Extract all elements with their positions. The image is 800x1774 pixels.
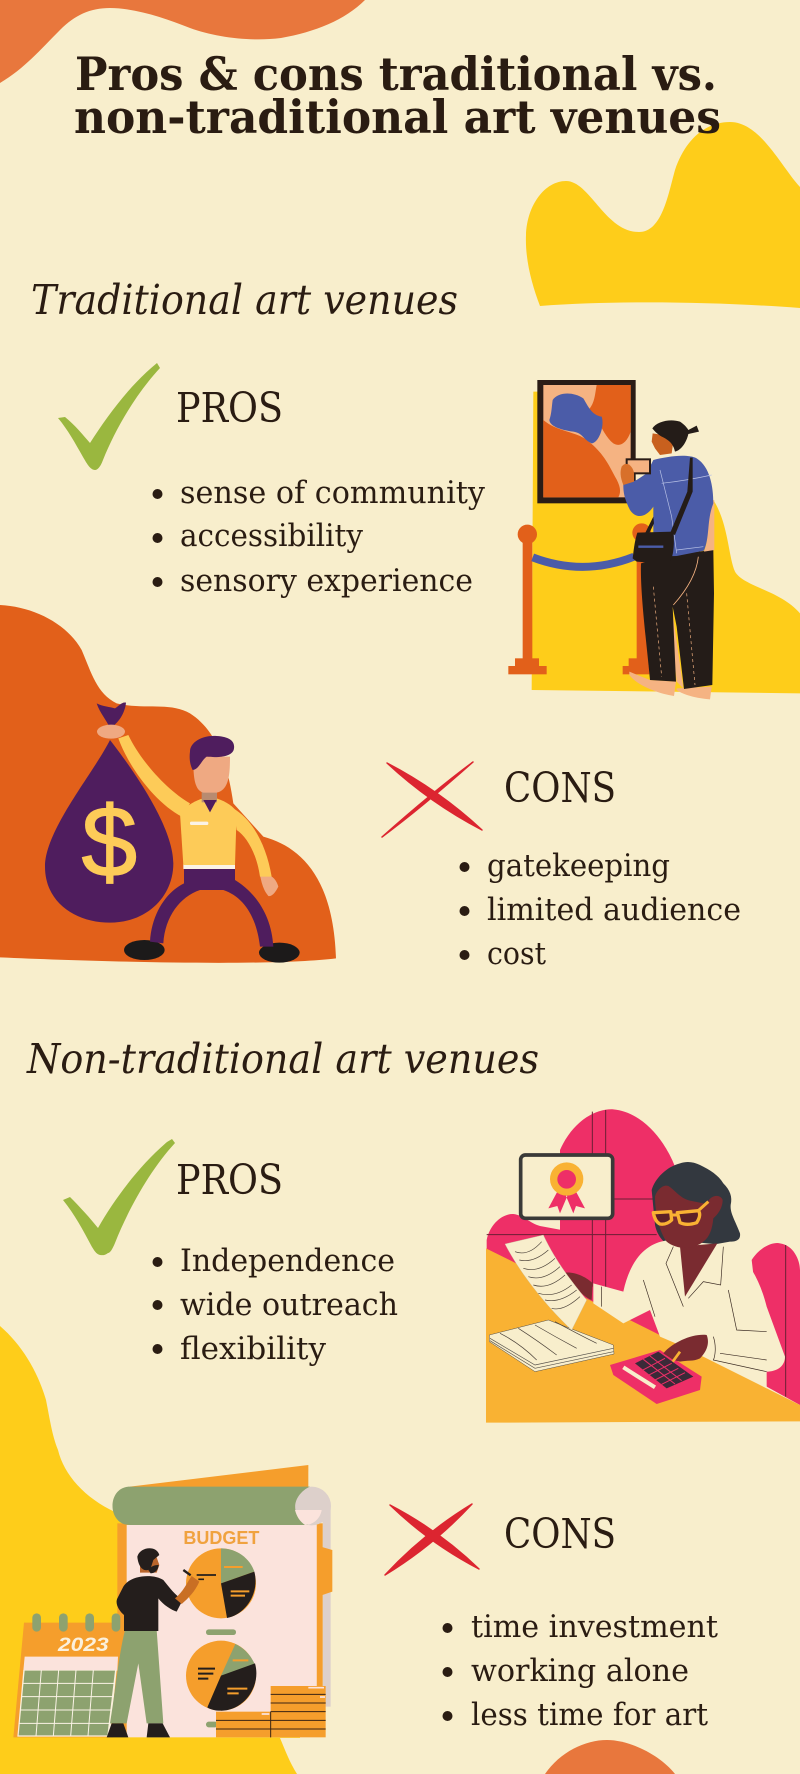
calendar: [13, 1613, 124, 1737]
orange backdrop: [0, 605, 336, 963]
list: non-traditional cons: [442, 1609, 719, 1733]
blob: top-left orange: [0, 0, 365, 83]
list: traditional cons: gatekeeping: [487, 848, 670, 884]
money bag: $: [82, 786, 137, 898]
title: [74, 47, 721, 144]
money bag: [45, 703, 173, 923]
heading: traditional art venues: Traditional art venues: [31, 276, 458, 324]
list: non-traditional cons: less time for art: [471, 1697, 709, 1733]
heading: pros 1: PROS: [176, 384, 283, 432]
list: traditional pros: accessibility: [180, 518, 363, 554]
title: non-traditional art venues: [74, 90, 721, 144]
list: non-traditional pros: [152, 1243, 398, 1367]
pie chart 1: [186, 1548, 256, 1618]
coin stacks: [216, 1686, 326, 1737]
desk: [486, 1248, 800, 1423]
illustration: visitor viewing painting: [508, 380, 800, 699]
list: traditional cons: limited audience: [487, 892, 741, 928]
icon: cross mark cons 1: [382, 762, 482, 837]
budget label: BUDGET: [183, 1527, 260, 1548]
list: non-traditional pros: Independence: [180, 1243, 395, 1279]
list: non-traditional pros: flexibility: [180, 1331, 326, 1367]
list: traditional cons: cost: [487, 936, 546, 972]
list: traditional pros: [152, 475, 485, 599]
presenter: [107, 1548, 199, 1737]
icon: cross mark cons 2: [385, 1504, 479, 1575]
heading: non-traditional art venues: Non-traditional art venues: [26, 1035, 539, 1083]
icon: check mark pros 1: [58, 363, 160, 470]
pie chart 2: [186, 1629, 256, 1727]
papers and book: [489, 1235, 614, 1372]
blob: top-right yellow: [526, 122, 800, 308]
illustration: budget poster: [13, 1465, 332, 1737]
list: traditional pros: sense of community: [180, 475, 485, 511]
woman: [562, 1162, 785, 1388]
framed painting: [537, 380, 636, 503]
calculator: [610, 1335, 708, 1404]
icon: check mark pros 2: [63, 1139, 175, 1255]
calendar: 2023: [57, 1635, 109, 1656]
heading: pros 2: PROS: [176, 1156, 283, 1204]
title: Pros & cons traditional vs.: [75, 47, 717, 101]
yellow backdrop: [532, 392, 800, 693]
certificate: [521, 1155, 613, 1218]
pink arches: [487, 1109, 800, 1405]
list: traditional pros: sensory experience: [180, 563, 473, 599]
heading: cons 2: CONS: [504, 1510, 616, 1558]
visitor figure: [621, 420, 714, 699]
list: non-traditional pros: wide outreach: [180, 1287, 398, 1323]
blob: bottom-left yellow: [0, 1326, 300, 1774]
blob: bottom orange: [545, 1740, 675, 1774]
heading: cons 1: CONS: [504, 764, 616, 812]
man: [97, 725, 300, 963]
stanchions and rope: [508, 523, 651, 674]
illustration: man with money bag: [0, 605, 336, 963]
illustration: woman with calculator: [486, 1109, 800, 1423]
poster backing: [112, 1465, 332, 1737]
list: non-traditional cons: time investment: [471, 1609, 719, 1645]
list: non-traditional cons: working alone: [471, 1653, 689, 1689]
list: traditional cons: [460, 848, 741, 972]
